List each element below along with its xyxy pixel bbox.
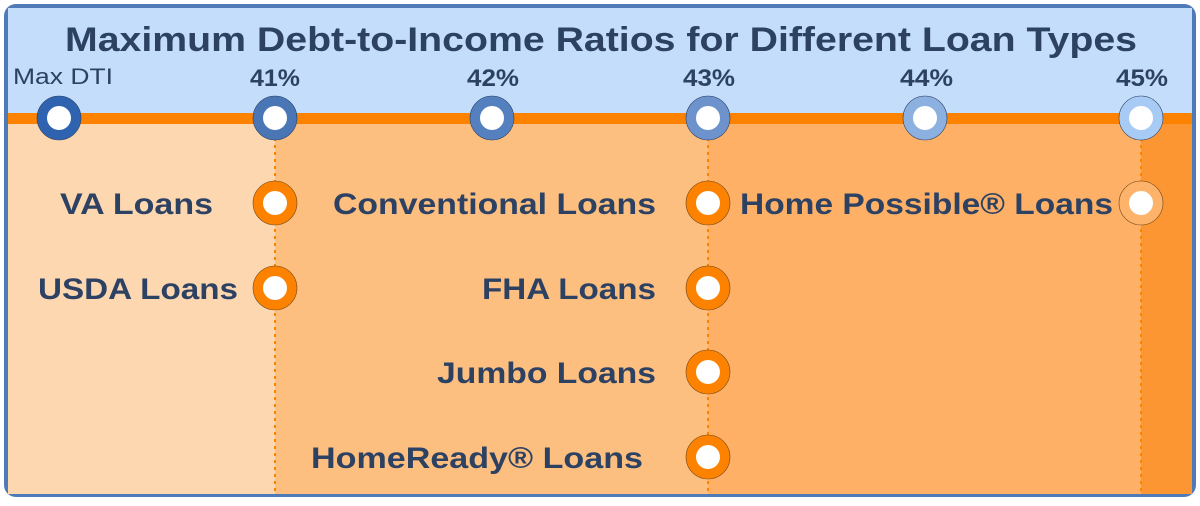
loan markers bbox=[253, 181, 1163, 479]
loan labels: VA Loans bbox=[60, 188, 213, 221]
axis markers bbox=[37, 96, 1163, 140]
axis labels bbox=[13, 64, 1168, 92]
axis labels: 44% bbox=[900, 65, 953, 92]
loan labels: FHA Loans bbox=[482, 273, 656, 306]
loan labels: USDA Loans bbox=[38, 273, 238, 306]
axis labels: 41% bbox=[250, 65, 300, 92]
axis labels: Max DTI bbox=[13, 64, 113, 89]
loan labels: Home Possible® Loans bbox=[740, 188, 1113, 221]
loan labels bbox=[38, 188, 1113, 475]
axis labels: 43% bbox=[683, 65, 735, 92]
loan labels: HomeReady® Loans bbox=[311, 442, 643, 475]
loan labels: Jumbo Loans bbox=[437, 357, 656, 390]
loan labels: Conventional Loans bbox=[333, 188, 656, 221]
axis labels: 45% bbox=[1116, 65, 1168, 92]
axis labels: 42% bbox=[467, 65, 519, 92]
title: Maximum Debt-to-Income Ratios for Different Loan Types bbox=[65, 21, 1137, 59]
